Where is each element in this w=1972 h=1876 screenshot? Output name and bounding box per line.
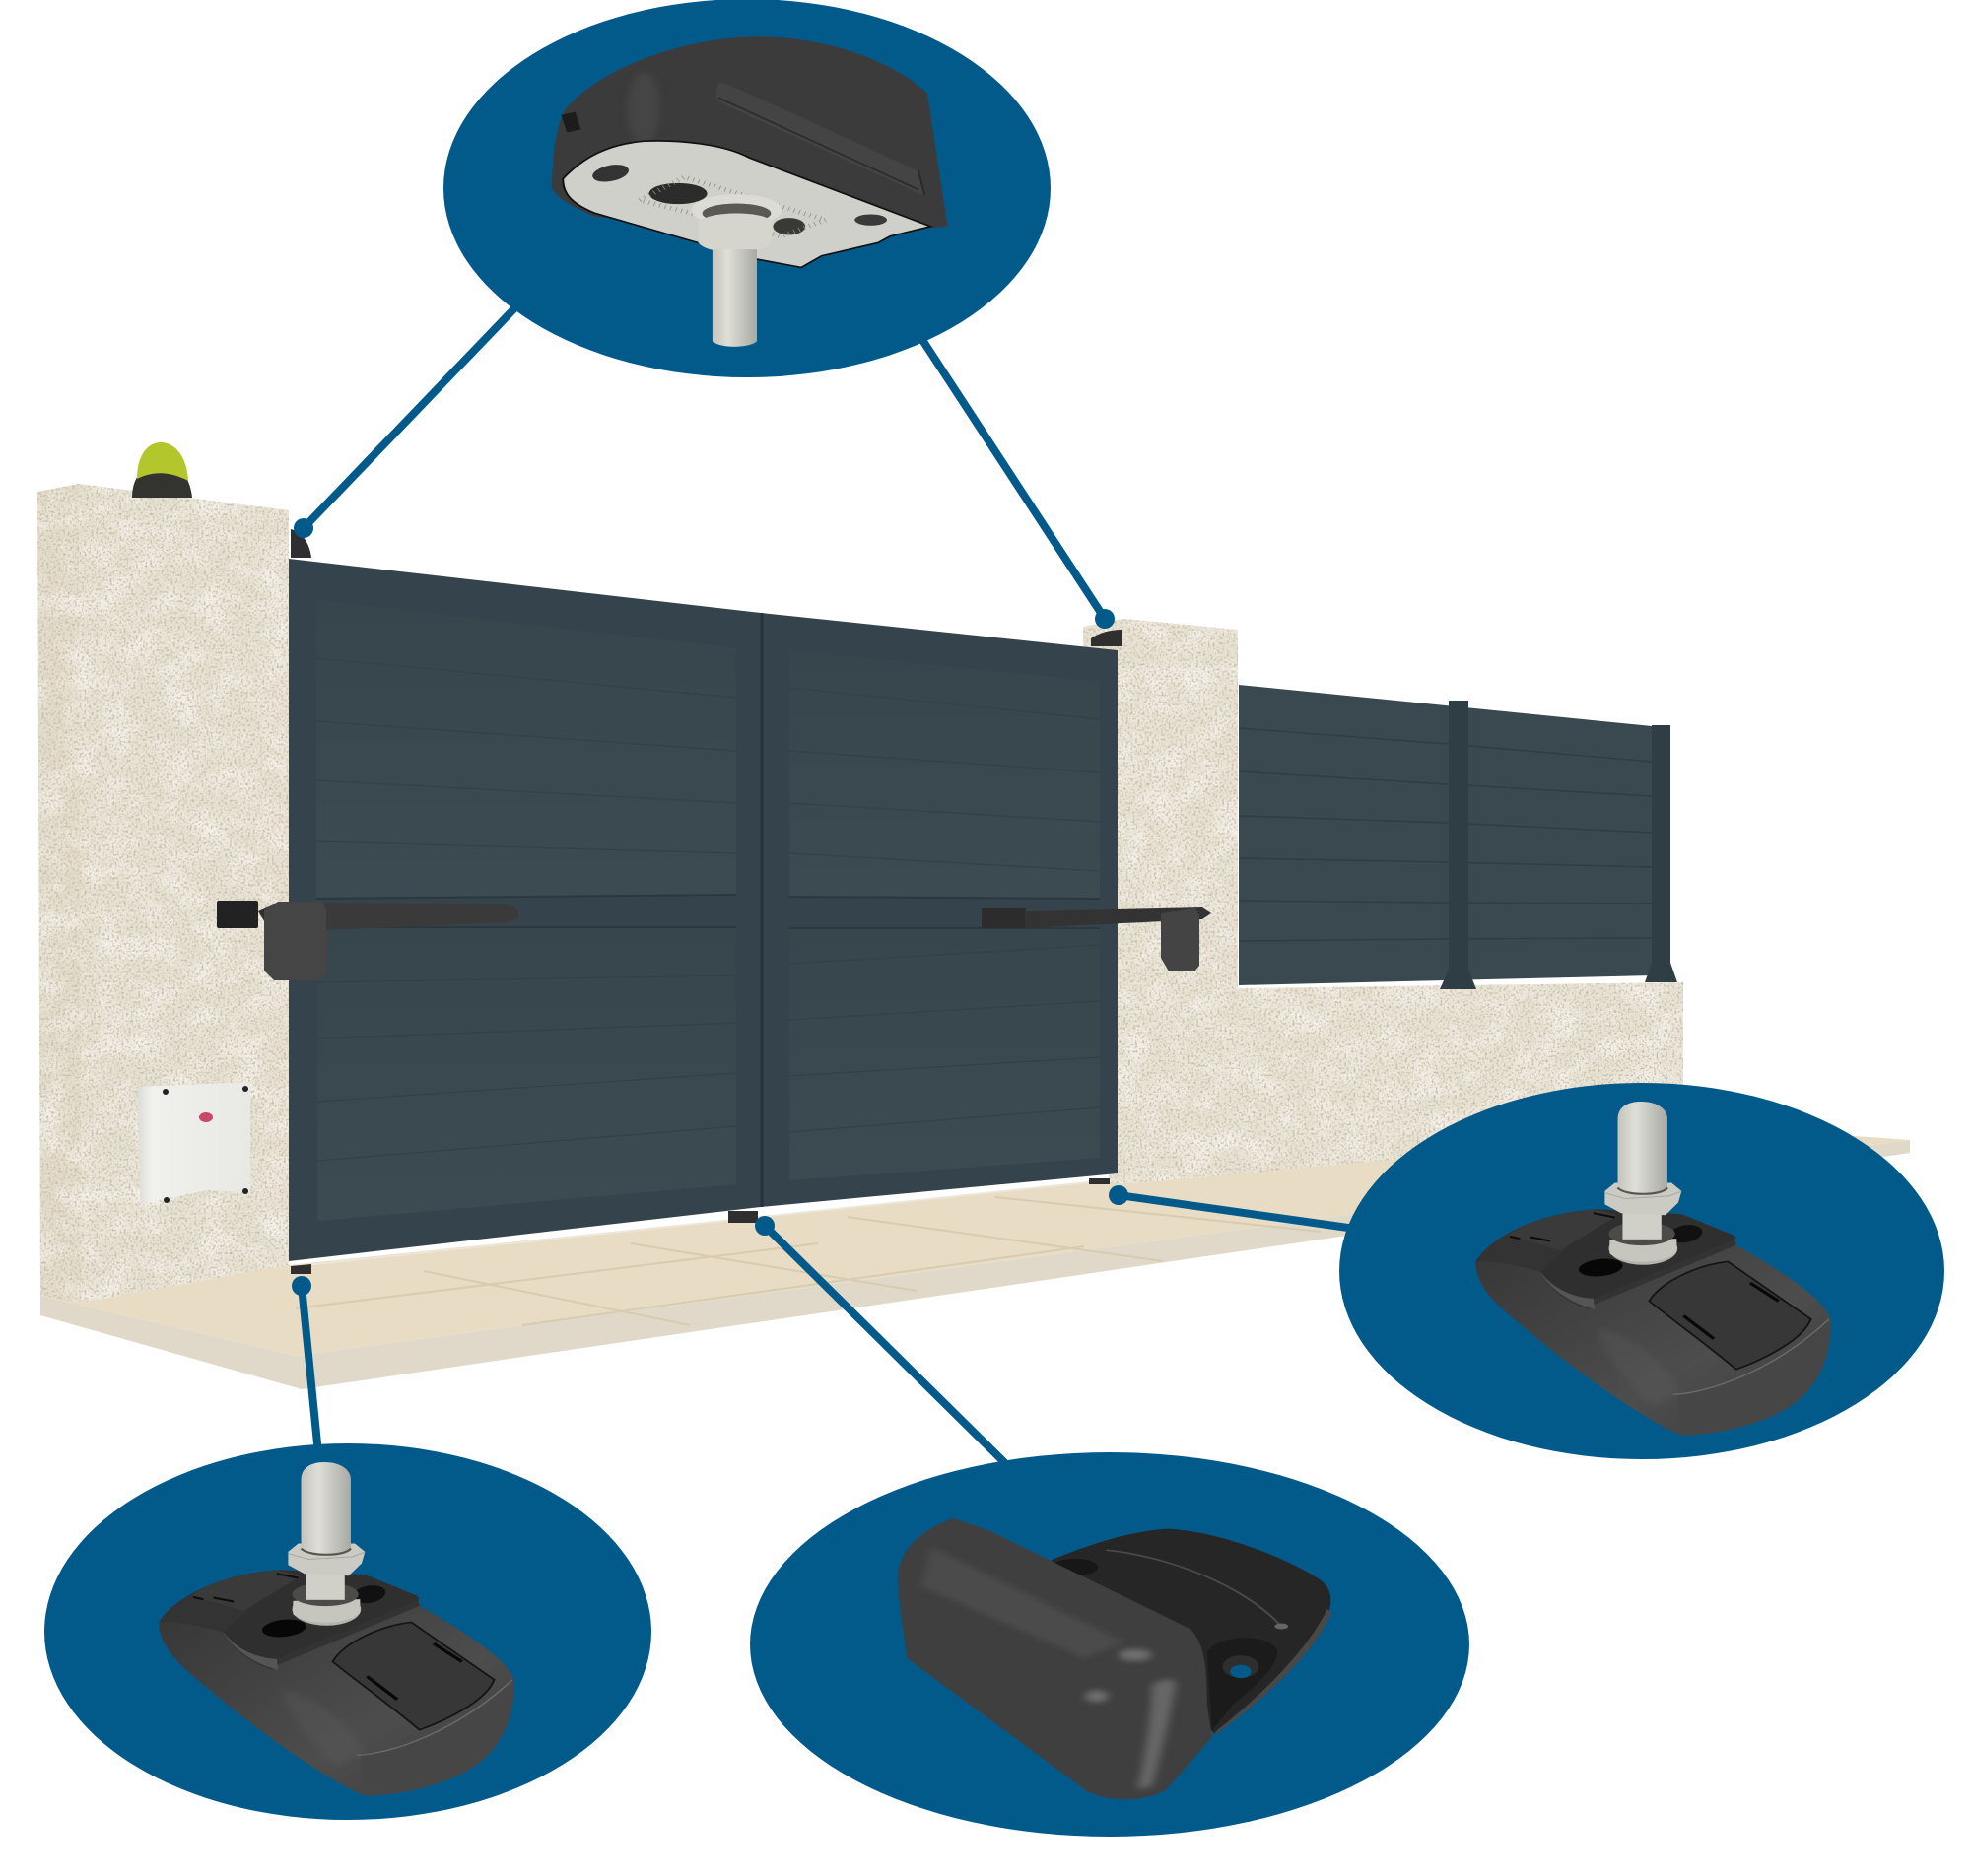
right actuator arm bbox=[982, 907, 1211, 972]
flashing beacon bbox=[132, 442, 192, 498]
low wall and right pillar bbox=[1083, 619, 1683, 1183]
callout: right hinge bbox=[1339, 1083, 1944, 1459]
icon: gate stop bbox=[898, 1518, 1331, 1799]
connector line: bottom centre bbox=[755, 1216, 1015, 1473]
left masonry pillar bbox=[37, 484, 289, 1303]
gate double leaf bbox=[289, 559, 1118, 1266]
left leaf panels bbox=[316, 600, 736, 1221]
right leaf panels bbox=[789, 650, 1100, 1180]
control box bbox=[138, 1082, 250, 1204]
fence posts bbox=[1440, 701, 1677, 989]
connector line: right bbox=[1109, 1185, 1355, 1229]
icon: upper hinge bracket bbox=[552, 36, 948, 347]
icon: lower hinge with pin bbox=[159, 1462, 514, 1795]
hinge fittings on gate bbox=[291, 529, 1122, 1274]
connector line: top left bbox=[294, 305, 517, 538]
connector line: bottom left bbox=[292, 1276, 318, 1453]
left actuator arm bbox=[217, 901, 518, 980]
callout: bottom centre gate stop bbox=[750, 1452, 1469, 1837]
callout: top hinge bbox=[443, 0, 1051, 377]
fence panels bbox=[1239, 685, 1677, 989]
ground slab bbox=[40, 1123, 1910, 1389]
callout: bottom left hinge bbox=[44, 1443, 651, 1820]
connector line: top right bbox=[922, 340, 1115, 629]
icon: lower hinge with pin, right bbox=[1475, 1102, 1831, 1435]
